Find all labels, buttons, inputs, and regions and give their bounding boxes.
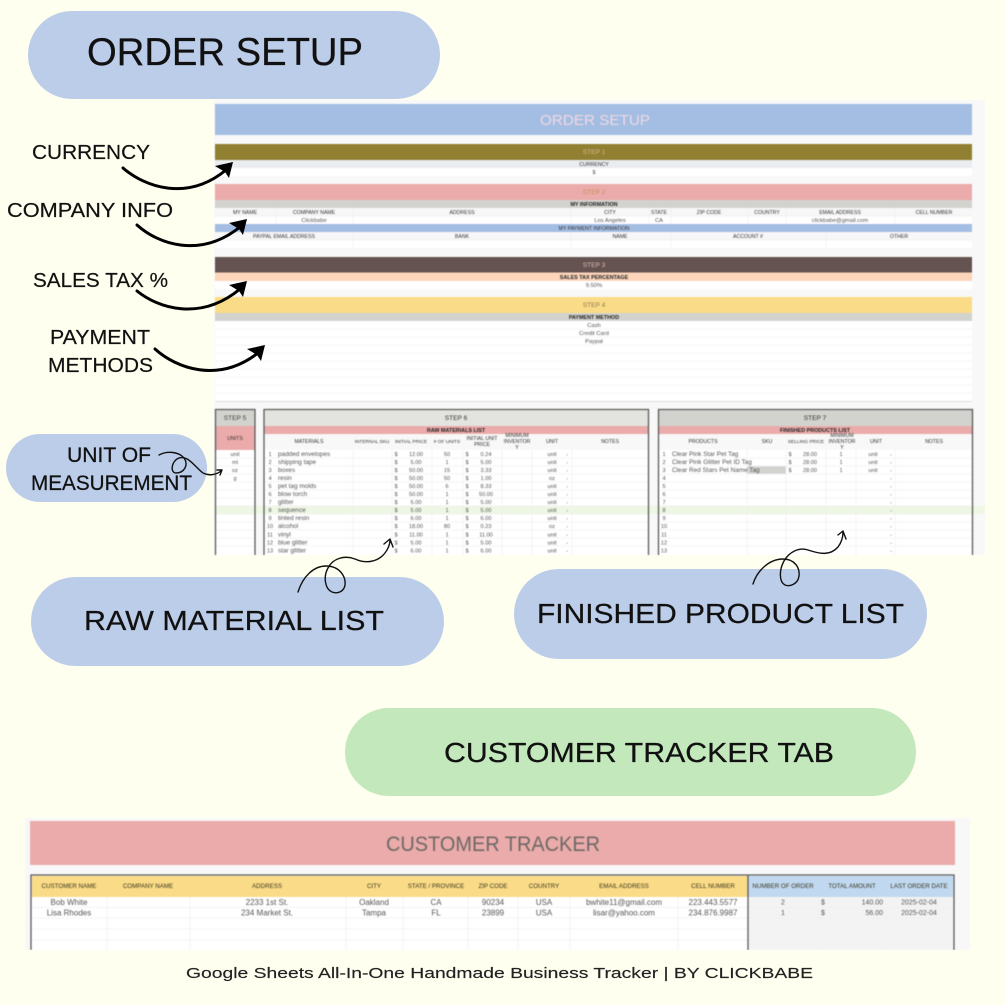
label: company info: COMPANY INFO: [7, 200, 173, 222]
customer rows: Bob White: [51, 898, 88, 907]
customer tracker banner: [30, 821, 955, 865]
step 2: company information: STEP 2: [583, 189, 606, 196]
raw materials rows: 50.00: [409, 468, 423, 474]
raw materials rows: 50.00: [409, 492, 423, 498]
customer tracker banner: CUSTOMER TRACKER: [386, 833, 600, 856]
raw materials rows: 11: [267, 532, 273, 538]
raw materials rows: vinyl: [278, 532, 291, 538]
label: payment methods: [48, 327, 153, 377]
raw materials rows: -: [566, 492, 568, 498]
raw materials rows: 6: [445, 484, 449, 490]
finished products rows: $: [788, 452, 792, 458]
step 6: raw materials list: STEP 6: [445, 415, 468, 422]
customer table: ZIP CODE: [478, 883, 508, 890]
step 6: raw materials list: RAW MATERIALS LIST: [427, 428, 486, 434]
customer table: LAST ORDER DATE: [890, 883, 948, 890]
step 2: company information: OTHER: [890, 234, 908, 240]
customer table: CUSTOMER NAME: [42, 883, 96, 890]
step 6: raw materials list: [264, 409, 649, 555]
raw materials rows: blue glitter: [278, 540, 308, 546]
step 6: raw materials list: INITIAL PRICE: [395, 439, 427, 445]
raw materials rows: 1.00: [481, 476, 491, 482]
finished products rows: $: [788, 468, 792, 474]
raw materials rows: 6.00: [411, 548, 421, 554]
raw materials rows: $: [394, 492, 398, 498]
step 2: company information: clickbabe@gmail.com: [812, 218, 868, 224]
step 6: raw materials list: MINIMUM: [505, 433, 529, 439]
step 3: sales tax: STEP 3: [583, 262, 606, 269]
callout pill: raw material list: RAW MATERIAL LIST: [84, 605, 384, 636]
customer rows: 140.00: [862, 900, 883, 906]
finished products rows: 1: [839, 452, 843, 458]
raw materials rows: 1: [445, 460, 449, 466]
step 4: payment methods: [215, 297, 972, 402]
customer rows: 2025-02-04: [901, 910, 937, 917]
raw materials rows: 5.00: [481, 500, 491, 506]
finished products rows: -: [890, 452, 892, 458]
raw materials rows: 10: [267, 524, 273, 530]
finished products rows: Clear Pink Star Pet Tag: [672, 451, 739, 458]
step 4: payment methods: Cash: [587, 323, 601, 329]
raw materials rows: unit: [547, 492, 557, 498]
finished products rows: 1: [839, 468, 843, 474]
step 2: company information: ZIP CODE: [697, 210, 722, 216]
customer table: TOTAL AMOUNT: [828, 883, 876, 890]
raw materials rows: sequence: [278, 507, 306, 514]
raw materials rows: $: [465, 524, 469, 530]
raw materials rows: $: [465, 468, 469, 474]
step 2: company information: ADDRESS: [449, 210, 475, 216]
finished products rows: 9: [662, 516, 666, 522]
customer rows: Tampa: [362, 908, 387, 918]
customer rows: [47, 898, 937, 918]
raw materials rows: unit: [547, 532, 557, 538]
customer table: [31, 875, 954, 950]
step 1: currency: STEP 1: [583, 149, 606, 156]
raw materials rows: 12: [267, 540, 273, 546]
step 6: raw materials list: NOTES: [601, 439, 619, 445]
finished products rows: 28.00: [803, 452, 817, 458]
arrow: unit of measurement: [159, 452, 222, 475]
raw materials rows: unit: [547, 540, 557, 546]
finished products rows: -: [890, 548, 892, 554]
raw materials rows: $: [394, 532, 398, 538]
step 5: units: ml: [232, 460, 238, 466]
raw materials rows: 6.00: [481, 548, 491, 554]
label: currency: CURRENCY: [32, 142, 150, 164]
raw materials rows: 5: [268, 484, 272, 490]
raw materials rows: glitter: [278, 499, 294, 506]
raw materials rows: unit: [547, 460, 557, 466]
raw materials rows: 50: [444, 476, 450, 482]
customer rows: 56.00: [865, 910, 883, 917]
raw materials rows: unit: [547, 468, 557, 474]
callout pill: raw material list: [31, 577, 444, 666]
callout pill: unit of measurement: [6, 434, 207, 502]
raw materials rows: 6: [268, 492, 272, 498]
step 2: company information: Los Angeles: [594, 218, 626, 224]
finished products rows: 4: [662, 476, 666, 482]
customer rows: 2: [781, 900, 785, 906]
step 2: company information: PAYPAL EMAIL ADDRESS: [253, 234, 315, 240]
step 2: company information: MY NAME: [233, 210, 258, 216]
raw materials rows: unit: [547, 500, 557, 506]
step 2: company information: MY PAYMENT INFORMATION: [559, 226, 630, 232]
customer table: CELL NUMBER: [691, 883, 735, 890]
step 7: finished products list: FINISHED PRODUCTS LIST: [780, 428, 851, 434]
finished products rows: 28.00: [803, 468, 817, 474]
raw materials rows: $: [465, 500, 469, 506]
raw materials rows: -: [566, 524, 568, 530]
panel: customer tracker spreadsheet: [25, 818, 970, 950]
customer rows: 234.876.9987: [689, 908, 738, 918]
customer rows: USA: [536, 908, 553, 918]
raw materials rows: 50.00: [409, 476, 423, 482]
raw materials rows: 8.33: [481, 484, 491, 490]
raw materials rows: 5.00: [411, 500, 421, 506]
step 2: company information: BANK: [455, 234, 470, 240]
finished products rows: 13: [661, 548, 667, 554]
raw materials rows: $: [465, 484, 469, 490]
callout pill: unit of measurement: MEASUREMENT: [31, 472, 192, 495]
finished products rows: 8: [662, 508, 666, 514]
customer rows: 234 Market St.: [241, 908, 293, 918]
raw materials rows: 1: [445, 548, 449, 554]
customer rows: 2025-02-04: [901, 900, 937, 906]
raw materials rows: 6.00: [411, 516, 421, 522]
step 2: company information: COUNTRY: [754, 210, 780, 216]
raw materials rows: $: [465, 516, 469, 522]
raw materials rows: [267, 451, 568, 554]
customer table: STATE / PROVINCE: [408, 883, 464, 890]
finished products rows: -: [890, 484, 892, 490]
raw materials rows: $: [394, 476, 398, 482]
raw materials rows: $: [465, 540, 469, 546]
step 2: company information: [215, 184, 972, 248]
step 3: sales tax: SALES TAX PERCENTAGE: [560, 275, 629, 281]
finished products rows: 1: [839, 460, 843, 466]
step 6: raw materials list: UNIT: [546, 439, 559, 445]
heading pill: order setup: [28, 11, 440, 99]
customer rows: 1: [781, 910, 785, 917]
customer rows: lisar@yahoo.com: [593, 908, 655, 918]
heading pill: order setup: ORDER SETUP: [87, 31, 363, 74]
finished products rows: 11: [661, 532, 667, 538]
raw materials rows: -: [566, 476, 568, 482]
step 6: raw materials list: # OF UNITS: [434, 439, 460, 445]
arrow: payment methods: [155, 345, 265, 370]
finished products rows: 10: [661, 524, 667, 530]
finished products rows: -: [890, 540, 892, 546]
raw materials rows: $: [465, 476, 469, 482]
raw materials rows: oz: [549, 476, 555, 482]
step 5: units: unit: [230, 452, 240, 458]
step 6: raw materials list: INVENTOR: [504, 439, 531, 445]
callout pill: finished product list: FINISHED PRODUCT LIST: [537, 598, 904, 629]
finished products rows: 28.00: [803, 460, 817, 466]
raw materials rows: -: [566, 484, 568, 490]
raw materials rows: $: [465, 508, 469, 514]
arrow: currency: [123, 162, 233, 189]
step 7: finished products list: SKU: [762, 439, 773, 445]
step 2: company information: CITY: [604, 210, 616, 216]
raw materials rows: -: [566, 500, 568, 506]
finished products rows: unit: [868, 460, 878, 466]
finished products rows: 12: [661, 540, 667, 546]
raw materials rows: pet tag molds: [278, 483, 316, 490]
step 6: raw materials list: Y: [515, 445, 519, 451]
finished products rows: -: [890, 524, 892, 530]
customer table: EMAIL ADDRESS: [599, 883, 649, 890]
raw materials rows: -: [566, 516, 568, 522]
step 6: raw materials list: INTERNAL SKU: [355, 439, 390, 445]
heading pill: customer tracker tab: [345, 708, 916, 796]
arrow: company info: [137, 219, 247, 246]
raw materials rows: 1: [445, 492, 449, 498]
step 7: finished products list: NOTES: [925, 439, 943, 445]
panel: order setup spreadsheet: [214, 100, 985, 555]
raw materials rows: $: [465, 460, 469, 466]
step 7: finished products list: STEP 7: [804, 415, 827, 422]
customer table: COMPANY NAME: [123, 883, 173, 890]
raw materials rows: boxes: [278, 467, 295, 474]
arrow: sales tax: [137, 281, 247, 309]
customer rows: 2233 1st St.: [246, 898, 288, 907]
raw materials rows: oz: [549, 524, 555, 530]
raw materials rows: tinted resin: [278, 515, 310, 522]
raw materials rows: 1: [445, 532, 449, 538]
step 4: payment methods: PAYMENT METHOD: [569, 315, 619, 321]
raw materials rows: $: [465, 492, 469, 498]
step 7: finished products list: PRODUCTS: [688, 439, 718, 445]
raw materials rows: 50.00: [479, 492, 493, 498]
raw materials rows: 7: [268, 500, 272, 506]
raw materials rows: unit: [547, 516, 557, 522]
raw materials rows: 5.00: [411, 508, 421, 514]
arrow: raw material list: [298, 539, 393, 593]
finished products rows: -: [890, 516, 892, 522]
raw materials rows: 1: [445, 508, 449, 514]
raw materials rows: -: [566, 468, 568, 474]
step 2: company information: COMPANY NAME: [293, 210, 336, 216]
step 7: finished products list: UNIT: [870, 439, 883, 445]
raw materials rows: 50.00: [409, 484, 423, 490]
raw materials rows: $: [465, 548, 469, 554]
raw materials rows: 1: [268, 452, 272, 458]
label: sales tax: SALES TAX %: [33, 270, 168, 292]
heading pill: customer tracker tab: CUSTOMER TRACKER TAB: [444, 737, 834, 768]
finished products rows: Clear Pink Glitter Pet ID Tag: [672, 459, 752, 466]
raw materials rows: unit: [547, 484, 557, 490]
footer caption: Google Sheets All-In-One Handmade Business Tracker | BY CLICKBABE: [186, 965, 813, 982]
raw materials rows: unit: [547, 452, 557, 458]
step 4: payment methods: Credit Card: [579, 331, 609, 337]
step 7: finished products list: INVENTOR: [829, 439, 856, 445]
finished products rows: 3: [662, 468, 666, 474]
raw materials rows: $: [394, 452, 398, 458]
customer table: ADDRESS: [252, 883, 282, 890]
customer rows: USA: [536, 898, 553, 907]
step 1: currency: [215, 144, 972, 176]
raw materials rows: 6.00: [481, 516, 491, 522]
step 2: company information: NAME: [612, 234, 628, 240]
label: payment methods: METHODS: [48, 355, 153, 377]
raw materials rows: 1: [445, 540, 449, 546]
raw materials rows: 50: [444, 452, 450, 458]
step 2: company information: MY INFORMATION: [570, 202, 618, 208]
step 7: finished products list: MINIMUM: [830, 433, 854, 439]
step 2: company information: Clickbabe: [301, 218, 327, 224]
raw materials rows: 0.24: [481, 452, 491, 458]
customer rows: 23899: [482, 908, 505, 918]
step 6: raw materials list: INITIAL UNIT: [467, 436, 498, 442]
customer table: CITY: [367, 883, 381, 890]
sheet title banner: [215, 104, 972, 135]
customer rows: 90234: [482, 898, 505, 907]
step 5: units: STEP 5: [224, 415, 247, 422]
raw materials rows: $: [394, 516, 398, 522]
raw materials rows: -: [566, 508, 568, 514]
cover below tracker: [0, 950, 1005, 1005]
customer rows: bwhite11@gmail.com: [586, 898, 662, 907]
step 1: currency: CURRENCY: [579, 162, 609, 168]
raw materials rows: resin: [278, 475, 292, 482]
raw materials rows: $: [465, 452, 469, 458]
step 6: raw materials list: PRICE: [474, 442, 490, 448]
raw materials rows: $: [394, 500, 398, 506]
step 3: sales tax: [215, 257, 972, 289]
raw materials rows: $: [394, 524, 398, 530]
customer rows: $: [821, 900, 825, 906]
step 7: finished products list: SELLING PRICE: [788, 439, 824, 445]
callout pill: unit of measurement: UNIT OF: [67, 444, 151, 467]
raw materials rows: $: [394, 468, 398, 474]
raw materials rows: shipping tape: [278, 459, 316, 466]
callout pill: finished product list: [514, 569, 927, 659]
step 3: sales tax: 9.50%: [586, 283, 602, 289]
customer rows: 223.443.5577: [689, 898, 738, 907]
step 5: units: oz: [232, 468, 238, 474]
step 4: payment methods: STEP 4: [583, 302, 606, 309]
raw materials rows: $: [465, 532, 469, 538]
raw materials rows: 13: [267, 548, 273, 554]
green highlighted row: [214, 506, 985, 514]
step 2: company information: ACCOUNT #: [733, 234, 763, 240]
finished products rows: -: [890, 468, 892, 474]
raw materials rows: $: [394, 540, 398, 546]
raw materials rows: 3: [268, 468, 272, 474]
raw materials rows: 11.00: [409, 532, 423, 538]
raw materials rows: alcohol: [278, 523, 298, 530]
raw materials rows: -: [566, 548, 568, 554]
step 6: raw materials list: MATERIALS: [294, 439, 324, 445]
raw materials rows: 4: [268, 476, 272, 482]
finished products rows: Clear Red Stars Pet Name Tag: [672, 467, 760, 474]
customer rows: CA: [430, 898, 442, 907]
raw materials rows: 8: [268, 508, 272, 514]
finished products rows: unit: [868, 468, 878, 474]
raw materials rows: 18.00: [409, 524, 423, 530]
finished products rows: -: [890, 460, 892, 466]
step 7: finished products list: Y: [840, 445, 844, 451]
finished products rows: 6: [662, 492, 666, 498]
arrow: finished product list: [753, 531, 846, 586]
raw materials rows: 9: [268, 516, 272, 522]
raw materials rows: 2: [268, 460, 272, 466]
label: payment methods: PAYMENT: [50, 327, 150, 349]
finished products rows: 1: [662, 452, 666, 458]
finished products rows: unit: [868, 452, 878, 458]
raw materials rows: 5.00: [411, 540, 421, 546]
step 5: units: [215, 409, 255, 555]
finished products rows: [661, 451, 892, 554]
finished products rows: 7: [662, 500, 666, 506]
finished products rows: 5: [662, 484, 666, 490]
raw materials rows: -: [566, 532, 568, 538]
step 5: units: UNITS: [227, 436, 243, 442]
finished products rows: -: [890, 508, 892, 514]
raw materials rows: 3.33: [481, 468, 491, 474]
step 4: payment methods: Paypal: [585, 339, 603, 345]
raw materials rows: blow torch: [278, 491, 308, 498]
raw materials rows: 1: [445, 516, 449, 522]
raw materials rows: 5.00: [481, 508, 491, 514]
raw materials rows: 1: [445, 500, 449, 506]
raw materials rows: 5.00: [481, 540, 491, 546]
customer rows: Oakland: [359, 898, 389, 907]
raw materials rows: 0.23: [481, 524, 491, 530]
customer table: NUMBER OF ORDER: [752, 883, 814, 890]
raw materials rows: $: [394, 460, 398, 466]
customer rows: $: [821, 910, 825, 917]
raw materials rows: 80: [444, 524, 450, 530]
step 7: finished products list: [658, 409, 973, 555]
raw materials rows: -: [566, 452, 568, 458]
raw materials rows: $: [394, 548, 398, 554]
customer table: COUNTRY: [529, 883, 559, 890]
finished products rows: -: [890, 500, 892, 506]
raw materials rows: -: [566, 460, 568, 466]
raw materials rows: -: [566, 540, 568, 546]
raw materials rows: $: [394, 484, 398, 490]
raw materials rows: unit: [547, 548, 557, 554]
finished products rows: -: [890, 492, 892, 498]
step 5: units: g: [233, 476, 237, 482]
step 2: company information: STATE: [651, 210, 668, 216]
finished products rows: -: [890, 532, 892, 538]
finished products rows: -: [890, 476, 892, 482]
finished products rows: 2: [662, 460, 666, 466]
customer rows: Lisa Rhodes: [47, 908, 91, 918]
step 2: company information: CA: [655, 218, 663, 224]
raw materials rows: 12.00: [409, 452, 423, 458]
raw materials rows: 11.00: [479, 532, 493, 538]
raw materials rows: 5.00: [481, 460, 491, 466]
raw materials rows: 5.00: [411, 460, 421, 466]
step 2: company information: EMAIL ADDRESS: [819, 210, 861, 216]
finished products rows: $: [788, 460, 792, 466]
customer rows: FL: [431, 908, 441, 918]
raw materials rows: unit: [547, 508, 557, 514]
raw materials rows: 15: [444, 468, 450, 474]
step 2: company information: CELL NUMBER: [916, 210, 953, 216]
sheet title banner: ORDER SETUP: [540, 112, 650, 129]
raw materials rows: star glitter: [278, 548, 307, 554]
raw materials rows: $: [394, 508, 398, 514]
step 1: currency: $: [592, 170, 596, 176]
raw materials rows: padded envelopes: [278, 451, 330, 458]
